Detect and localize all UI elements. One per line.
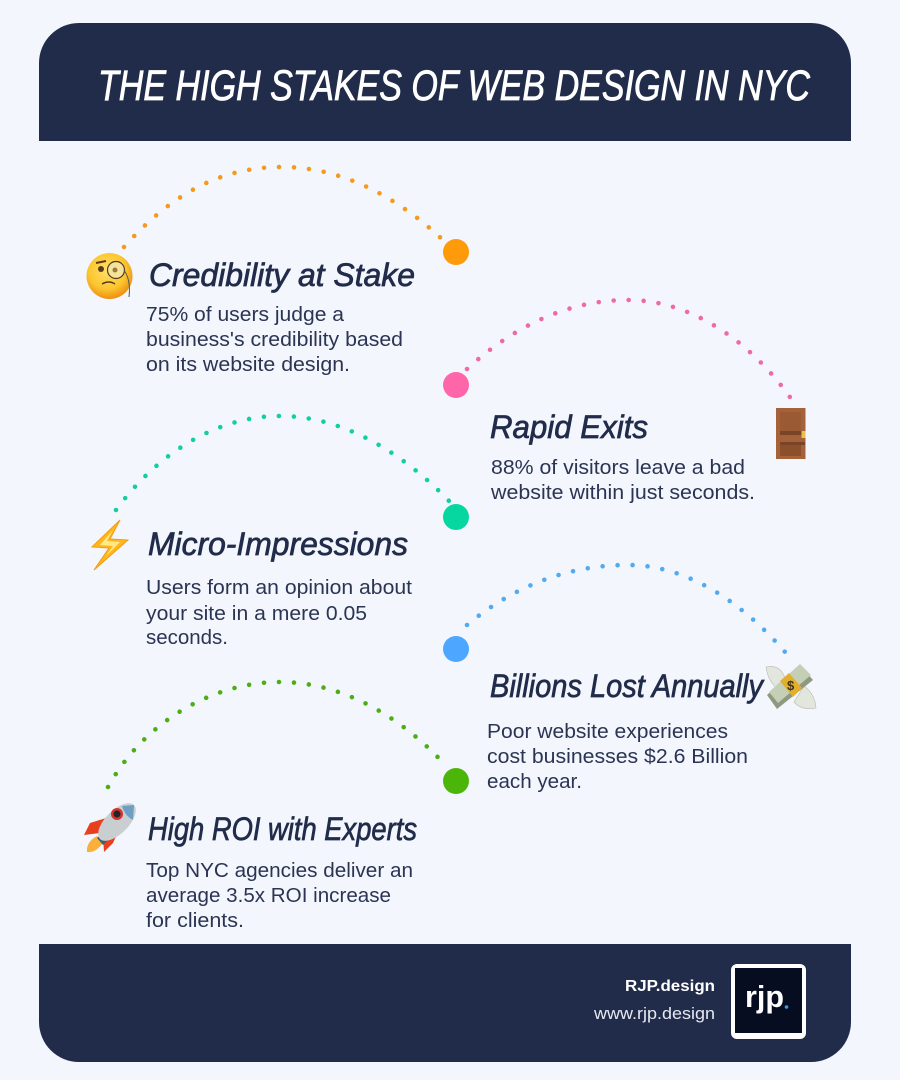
text block: for clients. [146, 910, 244, 932]
arc: pink dotted [467, 300, 792, 400]
text block: cost businesses $2.6 Billion [487, 746, 748, 768]
heading: Rapid Exits [490, 409, 648, 445]
text block: website within just seconds. [490, 482, 755, 504]
text block: Users form an opinion about [146, 577, 412, 599]
node: orange dot [443, 239, 469, 265]
heading: Credibility at Stake [149, 257, 415, 293]
panel: billions lost annually [443, 565, 816, 793]
website url: www.rjp.design [593, 1005, 715, 1023]
arc: blue dotted [467, 565, 785, 652]
arc: teal dotted [116, 416, 450, 510]
text block: business's credibility based [146, 329, 403, 351]
text block [146, 577, 412, 649]
text block: Top NYC agencies deliver an [146, 860, 413, 882]
arc: orange dotted [124, 167, 443, 247]
text block: average 3.5x ROI increase [146, 885, 391, 907]
text block: on its website design. [146, 354, 350, 376]
text block [487, 721, 748, 793]
brand name: RJP.design [625, 978, 715, 995]
panel: rapid exits [443, 300, 806, 504]
text block [490, 457, 755, 504]
footer banner [39, 944, 851, 1062]
node: blue dot [443, 636, 469, 662]
heading: Billions Lost Annually [490, 668, 765, 704]
icon: monocle face [86, 253, 132, 299]
text block: your site in a mere 0.05 [146, 603, 367, 625]
icon: lightning bolt [92, 520, 128, 570]
icon: money with wings [766, 664, 816, 709]
icon: rocket [84, 797, 142, 852]
text block: 88% of visitors leave a bad [491, 457, 745, 479]
text block [146, 860, 413, 932]
icon: money with wings: $ [787, 678, 795, 693]
heading: Micro-Impressions [148, 526, 408, 562]
arc: green dotted [108, 682, 447, 787]
header banner [39, 23, 851, 141]
text block: each year. [487, 771, 582, 793]
panel: micro-impressions [92, 416, 469, 649]
logo [731, 964, 806, 1039]
text block: Poor website experiences [487, 721, 728, 743]
logo: rjp [745, 979, 784, 1014]
heading: High ROI with Experts [148, 811, 417, 847]
node: teal dot [443, 504, 469, 530]
panel: high roi with experts [84, 682, 469, 932]
node: pink dot [443, 372, 469, 398]
text block: seconds. [146, 627, 228, 649]
node: green dot [443, 768, 469, 794]
icon: door [776, 408, 806, 459]
panel: credibility at stake [86, 167, 469, 376]
text block [146, 304, 403, 376]
text block: 75% of users judge a [146, 304, 345, 326]
